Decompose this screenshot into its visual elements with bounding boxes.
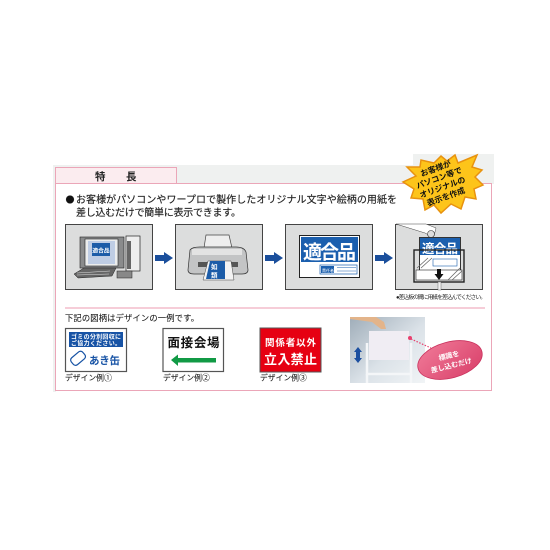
design example 3: 関係者以外 bbox=[265, 337, 316, 349]
heading tab: 長 bbox=[126, 171, 137, 183]
arrow 1 bbox=[155, 252, 173, 264]
design example 1 bbox=[66, 328, 126, 372]
callout: insert sheet: 差し込むだけ bbox=[430, 356, 473, 375]
caption 2: デザイン例② bbox=[163, 372, 210, 382]
step 2: printer: 類 bbox=[211, 270, 218, 280]
step 3: sign sheet: 適合品 bbox=[303, 242, 356, 264]
intro text bbox=[66, 193, 397, 219]
intro text: 差し込むだけで簡単に表示できます。 bbox=[76, 206, 241, 219]
note: ●差込板の間に用紙を差込んでください。 bbox=[396, 293, 486, 301]
callout: insert sheet bbox=[408, 334, 487, 386]
design example 2 bbox=[163, 328, 224, 372]
step 2: printer: 如 bbox=[211, 262, 218, 271]
design example 1: あき缶 bbox=[89, 354, 120, 367]
step 4: inserting sheet bbox=[396, 224, 482, 290]
step 1: computer: 適合品 bbox=[92, 246, 110, 254]
starburst callout: 表示を作成 bbox=[425, 185, 466, 208]
design example 3 bbox=[260, 328, 321, 372]
caption 1: デザイン例① bbox=[65, 372, 112, 382]
sample caption: 下記の図柄はデザインの一例です。 bbox=[65, 313, 199, 323]
arrow 2 bbox=[265, 252, 283, 264]
design example 1: ゴミの分別回収に bbox=[71, 333, 121, 341]
step 1: computer bbox=[66, 224, 152, 290]
step 2: printer bbox=[176, 224, 262, 290]
step 3: sign sheet: 責任者 bbox=[322, 267, 334, 273]
step 4: inserting sheet: 適合品 bbox=[422, 241, 458, 256]
panel: features bbox=[56, 184, 492, 390]
arrow 3 bbox=[375, 252, 393, 264]
heading tab: 特 bbox=[95, 170, 106, 183]
photo: sign stand bbox=[350, 317, 425, 383]
starburst callout bbox=[403, 155, 483, 213]
callout: insert sheet: 標識を bbox=[438, 349, 460, 363]
design example 2: 面接会場 bbox=[168, 335, 220, 350]
design example 3: 立入禁止 bbox=[264, 352, 317, 367]
starburst callout: パソコン等で bbox=[415, 165, 463, 191]
starburst callout: オリジナルの bbox=[419, 175, 467, 200]
caption 3: デザイン例③ bbox=[260, 372, 307, 382]
intro text: お客様がパソコンやワープロで製作したオリジナル文字や絵柄の用紙を bbox=[76, 193, 397, 206]
starburst callout: お客様が bbox=[419, 158, 452, 178]
step 3: sign sheet bbox=[286, 224, 372, 290]
heading tab bbox=[56, 168, 176, 184]
design example 1: ご協力ください。 bbox=[71, 340, 121, 348]
